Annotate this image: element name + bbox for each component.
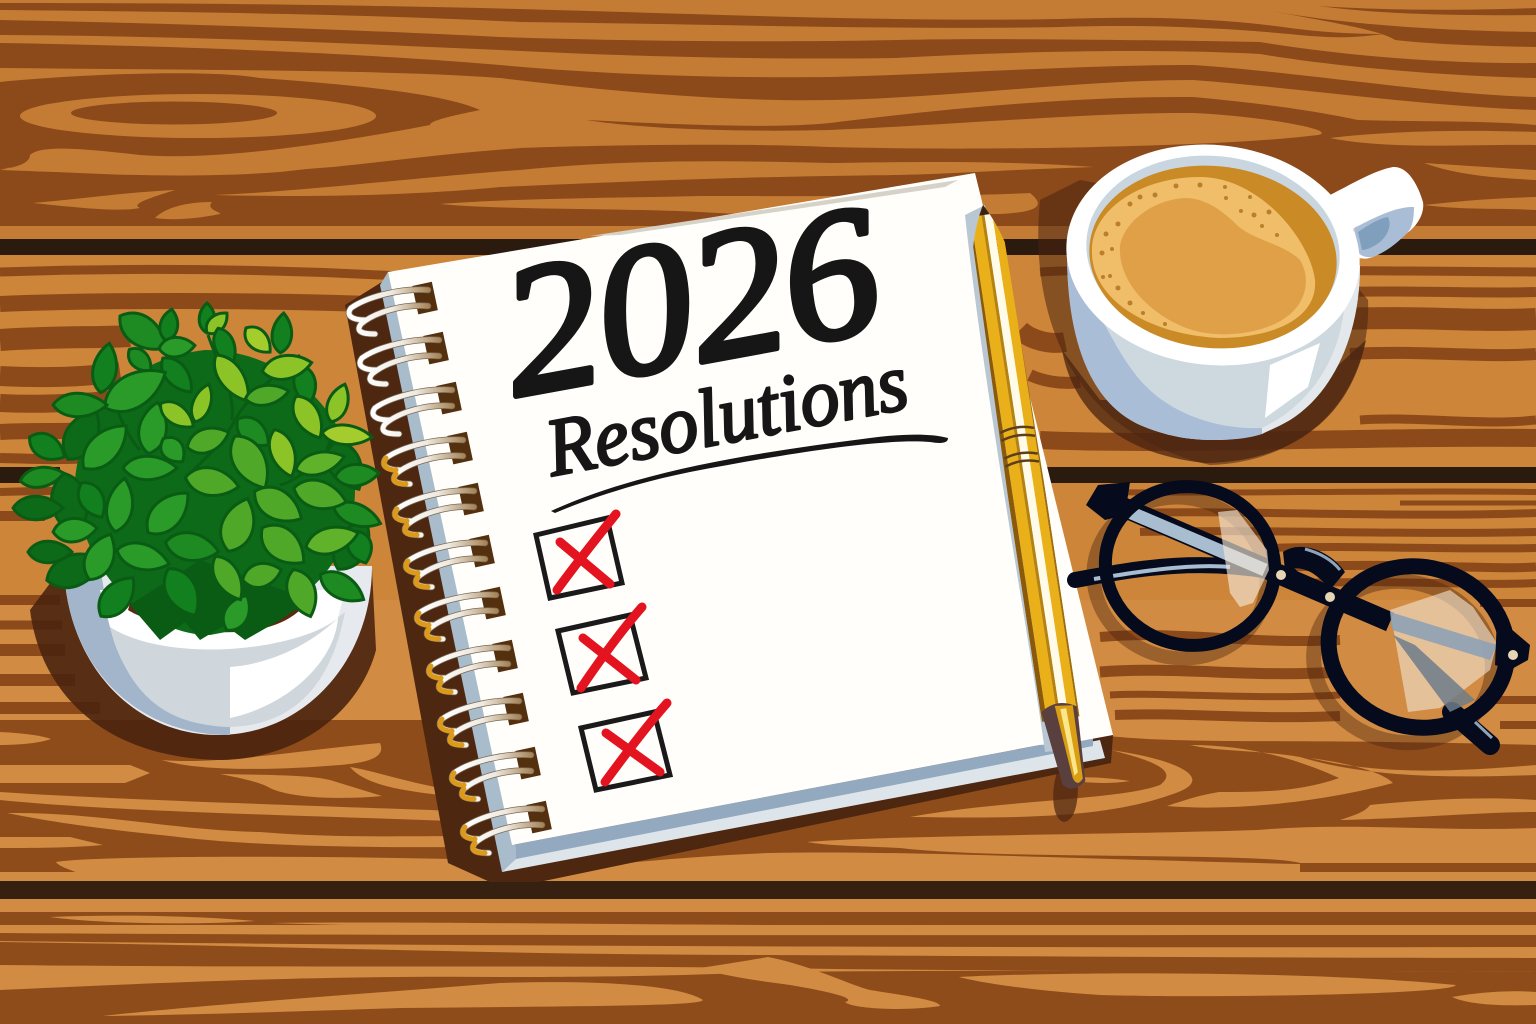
lower plank 3 grain, dark base with light islands — [0, 720, 1536, 881]
page edge — [512, 735, 1093, 859]
bridge — [1283, 547, 1345, 590]
pot — [64, 566, 372, 735]
foliage — [13, 303, 384, 640]
right lens — [1310, 546, 1530, 748]
checkbox 1 — [536, 514, 622, 598]
pen — [973, 205, 1086, 822]
plank 4 grain — [0, 899, 1536, 1024]
pen shadow on table — [1053, 770, 1078, 822]
pen shadow on page — [965, 205, 1065, 752]
binding edge — [380, 272, 516, 872]
checkbox 3 — [581, 703, 670, 790]
checkbox 2 — [558, 607, 646, 693]
coffee — [1080, 154, 1346, 360]
glasses shadow — [1075, 478, 1511, 763]
handle — [1330, 167, 1423, 259]
underline — [551, 435, 948, 513]
hinges — [1276, 570, 1518, 660]
rim — [1055, 130, 1371, 380]
notebook — [349, 165, 1113, 872]
coffee cup — [1055, 130, 1423, 440]
plank 1 grain — [0, 3, 1536, 232]
spiral binding — [349, 282, 552, 853]
shadows on table — [30, 180, 1368, 882]
glasses — [1075, 468, 1530, 763]
pen rings — [1000, 425, 1039, 467]
subtitle: Resolutions: Resolutions — [537, 336, 915, 494]
left lens — [1086, 468, 1293, 664]
potted plant — [13, 303, 384, 735]
pen tip — [1041, 701, 1089, 792]
title: 2026: 2026 — [486, 165, 895, 436]
temple arms — [1075, 505, 1492, 745]
page — [388, 173, 1113, 845]
cup body — [1067, 255, 1360, 440]
under sheet — [502, 740, 1105, 872]
plank 2 and plank 3 stripes — [0, 269, 1536, 725]
